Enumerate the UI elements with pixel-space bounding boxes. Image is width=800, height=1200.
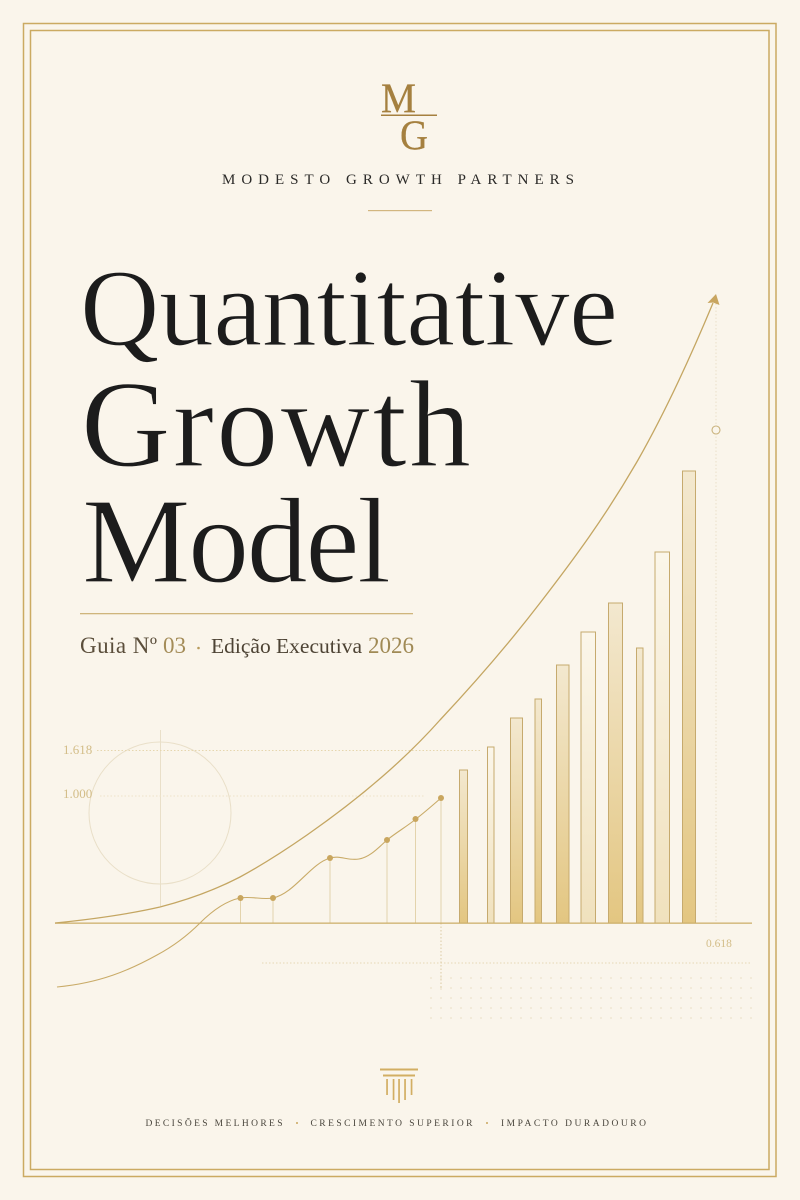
footer tagline: DECISÕES MELHORES — [146, 1117, 282, 1129]
title — [80, 247, 618, 609]
marker ring — [712, 426, 720, 434]
footer tagline: CRESCIMENTO SUPERIOR — [310, 1119, 473, 1129]
guide lines — [97, 300, 752, 990]
title: Growth — [81, 356, 471, 493]
axis labels: 1.618 — [63, 742, 92, 757]
data points — [238, 795, 444, 901]
title: Model — [82, 474, 391, 609]
subtitle: 2026 — [368, 633, 414, 658]
geometric circle guide — [89, 730, 231, 906]
title: Quantitative — [80, 247, 618, 369]
subtitle: Guia Nº — [80, 633, 157, 658]
exponential growth curve — [55, 303, 713, 923]
icon: column — [380, 1068, 418, 1103]
logo monogram: M — [381, 76, 416, 122]
data line — [57, 798, 441, 987]
arrow head — [708, 294, 720, 305]
footer tagline: IMPACTO DURADOURO — [501, 1119, 646, 1129]
bars — [460, 471, 696, 923]
subtitle: 03 — [163, 633, 186, 658]
company name: MODESTO GROWTH PARTNERS — [222, 172, 574, 188]
logo monogram: G — [400, 114, 428, 160]
subtitle: Edição Executiva — [211, 634, 362, 658]
data stems — [240, 798, 441, 923]
axis labels — [63, 742, 732, 950]
axis — [55, 922, 752, 924]
logo monogram — [381, 76, 437, 160]
chart — [55, 294, 752, 1025]
axis labels: 1.000 — [63, 786, 92, 801]
subtitle — [80, 633, 414, 658]
dot grid — [430, 977, 752, 1025]
footer tagline — [146, 1117, 646, 1129]
axis labels: 0.618 — [706, 938, 732, 950]
